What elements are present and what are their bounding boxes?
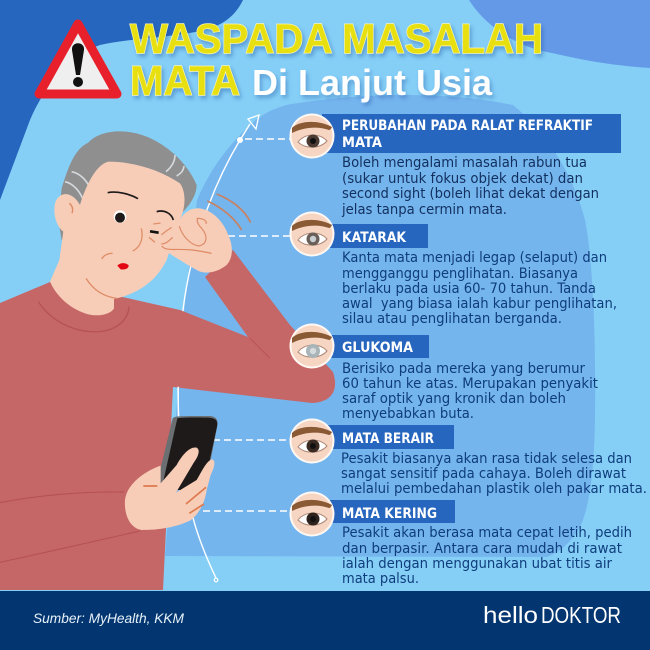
heading: KATARAK (342, 230, 407, 246)
body text: Pesakit biasanya akan rasa tidak selesa dan (341, 451, 632, 467)
banner (322, 114, 621, 153)
heading (342, 118, 593, 151)
timeline curve with arrow (178, 115, 259, 582)
title: MATA (130, 57, 240, 104)
icon: eye (290, 114, 334, 158)
banner (322, 224, 428, 248)
logo: hello (483, 602, 538, 628)
face and neck (38, 162, 270, 358)
icon: clouded eye (290, 324, 334, 368)
body text: mata palsu. (342, 571, 419, 587)
fist at the eye (160, 208, 232, 273)
item 2: katarak (290, 212, 617, 327)
body text: menyebabkan buta. (342, 406, 474, 422)
phone and hand (0, 387, 218, 562)
body text (342, 250, 617, 327)
logo (483, 602, 621, 628)
body text: Kanta mata menjadi legap (selaput) dan (342, 250, 607, 266)
item 3: glukoma (290, 324, 598, 422)
banner (322, 425, 454, 449)
body text: (sukar untuk fokus objek dekat) dan (342, 171, 583, 187)
banner (322, 335, 429, 358)
icon: eye (290, 418, 334, 464)
body text: silau atau penglihatan berganda. (342, 311, 562, 327)
body text: mengganggu penglihatan. Biasanya (342, 266, 578, 282)
body text: saraf optik yang kronik dan boleh (342, 391, 566, 407)
hair (58, 131, 197, 240)
sweater body (0, 250, 335, 590)
body text: awal yang biasa ialah kabur penglihatan, (342, 296, 617, 312)
title: WASPADA MASALAH (130, 15, 543, 62)
heading: MATA KERING (342, 506, 437, 522)
source: Sumber: MyHealth, KKM (33, 610, 184, 626)
body text: sangat sensitif pada cahaya. Boleh dirawat (341, 466, 626, 482)
illustration: older man rubbing eye (0, 131, 335, 590)
body text (342, 361, 598, 422)
footer bar (0, 591, 650, 650)
heading: MATA (342, 135, 382, 151)
heading: MATA BERAIR (342, 431, 434, 447)
body text: 60 tahun ke atas. Merupakan penyakit (342, 376, 598, 392)
title: Di Lanjut Usia (252, 62, 493, 103)
logo: DOKTOR (541, 602, 621, 628)
heading: PERUBAHAN PADA RALAT REFRAKTIF (342, 118, 593, 134)
item 1: refractive changes (290, 114, 621, 218)
item 4: mata berair (290, 418, 647, 497)
banner (322, 500, 455, 523)
body text: dan berpasir. Antara cara mudah di rawat (342, 541, 622, 557)
body text (341, 451, 647, 497)
body text: second sight (boleh lihat dekat dengan (342, 186, 599, 202)
motion lines (207, 194, 251, 230)
icon: eye with cataract (290, 212, 334, 256)
heading: GLUKOMA (342, 340, 413, 356)
dashed connectors (203, 139, 292, 511)
body text (341, 155, 599, 218)
body text: Pesakit akan berasa mata cepat letih, pedih (342, 525, 632, 541)
body text: jelas tanpa cermin mata. (341, 202, 507, 218)
body text: Berisiko pada mereka yang berumur (342, 361, 585, 377)
body text: berlaku pada usia 60- 70 tahun. Tanda (342, 281, 596, 297)
body text: Boleh mengalami masalah rabun tua (342, 155, 587, 171)
body text: ialah dengan menggunakan ubat titis air (342, 556, 612, 572)
warning triangle icon (39, 24, 117, 94)
icon: eye (290, 492, 334, 536)
title (130, 15, 543, 104)
body text (342, 525, 632, 587)
item 5: mata kering (290, 492, 632, 587)
